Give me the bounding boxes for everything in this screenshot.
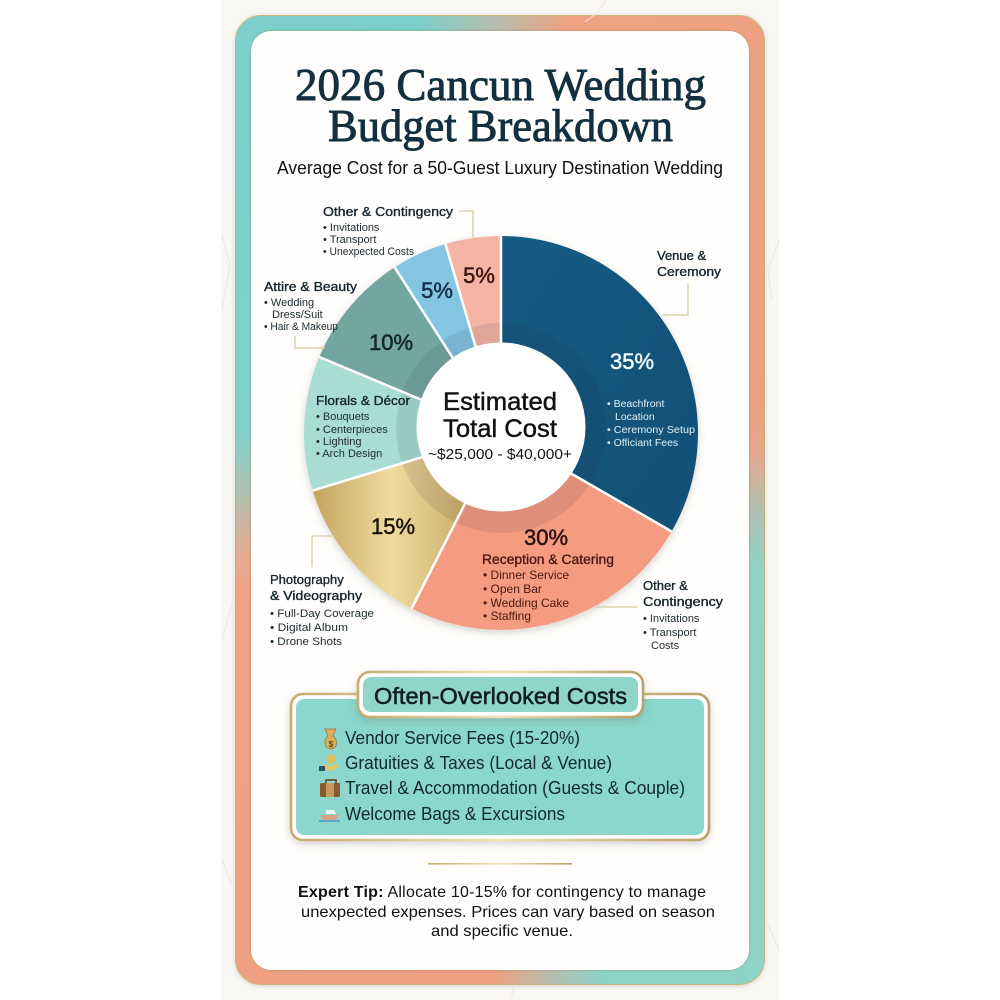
label: florals and decor: • Bouquets bbox=[316, 411, 370, 423]
label: other and contingency right: • Invitations bbox=[643, 613, 700, 625]
label: attire and beauty: Attire & Beauty bbox=[264, 279, 358, 294]
panel: often-overlooked costs bbox=[291, 672, 709, 840]
label: reception and catering: • Staffing bbox=[483, 609, 531, 623]
venue details: • Ceremony Setup bbox=[607, 424, 695, 436]
label: other and contingency right: Contingency bbox=[643, 594, 724, 609]
label: florals and decor: • Centerpieces bbox=[316, 424, 388, 436]
inner shade ring bbox=[396, 323, 606, 533]
label: venue and ceremony: Ceremony bbox=[657, 264, 722, 279]
percent: 30: 30% bbox=[524, 525, 568, 550]
percent: 10: 10% bbox=[369, 330, 413, 355]
label: florals and decor: • Arch Design bbox=[316, 448, 382, 460]
slice: photography 15% bbox=[313, 433, 501, 608]
expert tip bbox=[298, 884, 715, 940]
label: venue and ceremony bbox=[657, 248, 722, 315]
icon: hand with coin bbox=[319, 754, 339, 771]
label: reception and catering: • Open Bar bbox=[483, 582, 542, 596]
panel heading bbox=[358, 672, 643, 717]
item: gratuities: Gratuities & Taxes (Local & Venue) bbox=[345, 753, 612, 773]
center label: Estimated bbox=[443, 388, 557, 416]
icon: suitcase bbox=[320, 780, 340, 797]
label: other and contingency right: Other & bbox=[643, 578, 688, 593]
label: other and contingency right: Costs bbox=[651, 640, 680, 652]
subtitle: Average Cost for a 50-Guest Luxury Destination Wedding bbox=[277, 158, 723, 178]
label: other and contingency top: Other & Contingency bbox=[323, 204, 454, 219]
label: other and contingency top bbox=[323, 204, 473, 258]
expert tip: unexpected expenses. Prices can vary based on season bbox=[301, 904, 715, 921]
slice: blue 5% bbox=[395, 244, 501, 433]
label: photography and videography bbox=[270, 536, 374, 648]
expert tip: and specific venue. bbox=[431, 923, 573, 940]
slice: venue 35% bbox=[501, 236, 698, 532]
label: florals and decor bbox=[316, 393, 411, 460]
gradient frame bbox=[235, 15, 765, 985]
label: other and contingency right bbox=[595, 578, 724, 652]
slice: reception 30% bbox=[412, 433, 672, 630]
slice base shadow bbox=[304, 236, 698, 630]
center label: Total Cost bbox=[443, 415, 557, 443]
expert tip: Expert Tip: Allocate 10-15% for contingency to manage bbox=[298, 884, 706, 901]
percent: 35: 35% bbox=[610, 349, 654, 374]
label: reception and catering: • Dinner Service bbox=[483, 568, 570, 582]
venue details: • Officiant Fees bbox=[607, 437, 678, 449]
label: other and contingency right: • Transport bbox=[643, 627, 696, 639]
percent: 5 blue: 5% bbox=[421, 278, 453, 303]
percent labels bbox=[369, 263, 654, 550]
item: welcome bags: Welcome Bags & Excursions bbox=[345, 804, 565, 824]
label: photography and videography: & Videography bbox=[270, 588, 363, 603]
title: Budget Breakdown bbox=[328, 100, 673, 151]
label: photography and videography: Photography bbox=[270, 572, 344, 587]
slice: pink 5% bbox=[445, 236, 501, 433]
marble veins bbox=[222, 0, 779, 1000]
label: attire and beauty: Dress/Suit bbox=[272, 309, 323, 321]
panel heading: Often-Overlooked Costs bbox=[374, 683, 627, 709]
label: attire and beauty bbox=[264, 279, 358, 348]
label: florals and decor: • Lighting bbox=[316, 436, 361, 448]
marble background bbox=[221, 0, 779, 1000]
label: attire and beauty: • Wedding bbox=[264, 297, 314, 309]
white card bbox=[251, 31, 749, 970]
center label bbox=[428, 388, 572, 463]
label: other and contingency top: • Unexpected Costs bbox=[323, 246, 414, 258]
percent: 15: 15% bbox=[371, 514, 415, 539]
label: photography and videography: • Digital Album bbox=[270, 622, 348, 634]
icon: money bag bbox=[325, 729, 337, 749]
venue details: • Beachfront bbox=[607, 398, 664, 410]
label: venue and ceremony: Venue & bbox=[657, 248, 706, 263]
label: reception and catering bbox=[482, 551, 614, 623]
label: florals and decor: Florals & Décor bbox=[316, 393, 411, 408]
label: photography and videography: • Full-Day Coverage bbox=[270, 608, 374, 620]
donut chart bbox=[304, 236, 698, 630]
icon: money bag: $ bbox=[329, 740, 334, 749]
venue details: Location bbox=[615, 411, 655, 423]
venue details bbox=[607, 398, 695, 449]
percent: 5 pink: 5% bbox=[463, 263, 495, 288]
label: other and contingency top: • Transport bbox=[323, 234, 376, 246]
item: travel: Travel & Accommodation (Guests & Couple) bbox=[345, 778, 685, 798]
label: attire and beauty: • Hair & Makeup bbox=[264, 321, 338, 333]
center circle bbox=[416, 342, 586, 512]
icon: ship bbox=[319, 810, 340, 822]
item: vendor fees: Vendor Service Fees (15-20%) bbox=[345, 728, 580, 748]
slice separators bbox=[313, 236, 672, 608]
title: 2026 Cancun Wedding bbox=[295, 59, 706, 110]
label: reception and catering: Reception & Catering bbox=[482, 551, 614, 567]
title bbox=[295, 59, 706, 151]
slice: attire 10% bbox=[319, 267, 501, 433]
slice: florals bbox=[304, 357, 501, 491]
label: other and contingency top: • Invitations bbox=[323, 222, 380, 234]
center label: ~$25,000 - $40,000+ bbox=[428, 447, 572, 463]
label: photography and videography: • Drone Shots bbox=[270, 636, 343, 648]
label: reception and catering: • Wedding Cake bbox=[483, 596, 569, 610]
